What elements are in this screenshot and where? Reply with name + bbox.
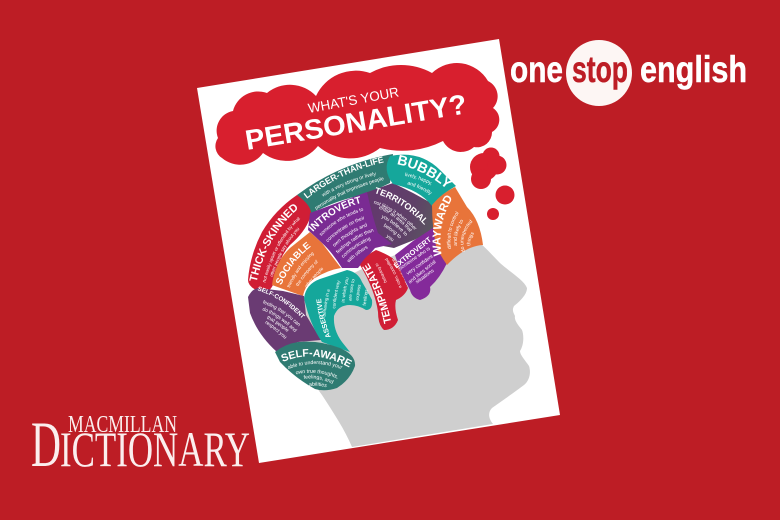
segment: larger-than-life: personality that impresses people: [315, 177, 384, 210]
segment: temperate: [360, 250, 408, 330]
segment: wayward: WAYWARD: [431, 193, 455, 257]
title: personality: PERSONALITY?: [243, 88, 469, 156]
segment: bubbly: and friendly: [408, 182, 432, 195]
segment: self-confident: feeling that you can: [263, 300, 300, 326]
segment: introvert: someone who tends to: [320, 208, 364, 236]
segment: territorial: enter an area that: [379, 206, 412, 232]
segment: sociable: SOCIABLE: [276, 242, 311, 284]
segment: territorial: not liking it when other: [374, 201, 416, 230]
segment: assertive: behaving in a: [322, 290, 330, 316]
segment: territorial: TERRITORIAL: [376, 187, 426, 225]
head silhouette: [300, 240, 530, 447]
segment: introvert: [308, 192, 392, 268]
segment: introvert: communicating: [342, 237, 371, 258]
segment: introvert: with others: [347, 246, 368, 262]
segment: self-confident: SELF-CONFIDENT: [258, 286, 306, 318]
segment: introvert: feelings rather than: [336, 229, 374, 254]
title cloud: [215, 63, 499, 165]
segment: temperate: way, not extreme: [390, 257, 410, 287]
segment: self-confident: that people: [267, 316, 288, 332]
segment: self-aware: feelings, and: [303, 374, 334, 386]
segment: introvert: INTROVERT: [308, 196, 360, 232]
logo: onestopenglish: stop: [572, 49, 628, 90]
segment: self-aware: able to understand your: [288, 360, 342, 369]
title: what's your: WHAT'S YOUR: [307, 84, 400, 116]
segment: sociable: other people: [305, 268, 324, 288]
segment: extrovert: EXTROVERT: [392, 235, 433, 270]
segment: bubbly: [386, 154, 456, 206]
segment: territorial: you: [386, 234, 394, 242]
segment: assertive: [304, 270, 372, 352]
logo: macmillan dictionary: MACMILLAN: [68, 412, 177, 438]
segment: wayward: things: [466, 231, 476, 246]
logo: macmillan dictionary: ICTIONARY: [60, 421, 250, 477]
segment: assertive: express: [356, 284, 361, 300]
segment: larger-than-life: with a very strong or lively: [322, 172, 376, 196]
segment: self-aware: [275, 342, 356, 390]
segment: larger-than-life: LARGER-THAN-LIFE: [304, 156, 384, 198]
segment: larger-than-life: [297, 154, 393, 213]
segment: thick-skinned: THICK-SKINNED: [249, 204, 297, 281]
segment: temperate: behaving in: [374, 262, 388, 284]
segment: territorial: you believe to: [381, 215, 407, 236]
logo: macmillan dictionary: D: [31, 409, 61, 481]
segment: extrovert: someone who is: [398, 246, 432, 271]
segment: sociable: the company of: [296, 260, 318, 286]
segment: self-confident: respect you: [265, 321, 286, 339]
segment: bubbly: lively, happy,: [405, 172, 432, 186]
segment: wayward: [432, 187, 483, 265]
segment: assertive: feelings: [362, 290, 368, 306]
segment: thick-skinned: not easily upset or offended by what: [263, 217, 300, 282]
segment: assertive: in which you: [341, 277, 349, 302]
segment: wayward: difficult to control: [446, 211, 461, 249]
segment: extrovert: very confident: [405, 253, 435, 277]
segment: self-aware: SELF-AWARE: [281, 349, 352, 368]
segment: extrovert: [394, 228, 446, 300]
segment: temperate: TEMPERATE: [360, 261, 394, 324]
segment: assertive: confident way: [332, 280, 341, 308]
segment: assertive: ASSERTIVE: [316, 298, 331, 337]
logo: onestopenglish: [510, 40, 747, 106]
segment: wayward: and likely to: [453, 218, 465, 246]
thought bubbles: [470, 148, 514, 220]
poster sheet: [197, 39, 560, 463]
logo: onestopenglish: one: [510, 49, 563, 90]
segment: self-aware: abilities: [309, 382, 328, 389]
segment: territorial: [367, 183, 434, 248]
segment: bubbly: BUBBLY: [398, 154, 452, 187]
segment: self-confident: do things well and: [262, 308, 298, 332]
segment: self-confident: [248, 286, 321, 352]
segment: temperate: a calm, controlled: [383, 257, 402, 289]
segment: wayward: do unexpected: [459, 219, 474, 253]
logo: onestopenglish: english: [640, 49, 747, 90]
segment: territorial: belong to: [384, 223, 401, 238]
segment: self-aware: own true thoughts,: [295, 369, 339, 381]
segment: thick-skinned: other people say about you: [270, 228, 300, 276]
segment: sociable: [272, 232, 341, 296]
segment: introvert: own thoughts and: [333, 222, 368, 246]
segment: extrovert: and likes social: [407, 259, 437, 285]
segment: assertive: are sure to: [349, 279, 354, 301]
logo: macmillan dictionary: [31, 409, 250, 481]
segment: extrovert: situations: [415, 268, 436, 285]
segment: sociable: friendly and enjoying: [287, 252, 314, 288]
segment: introvert: concentrate on their: [326, 216, 364, 242]
